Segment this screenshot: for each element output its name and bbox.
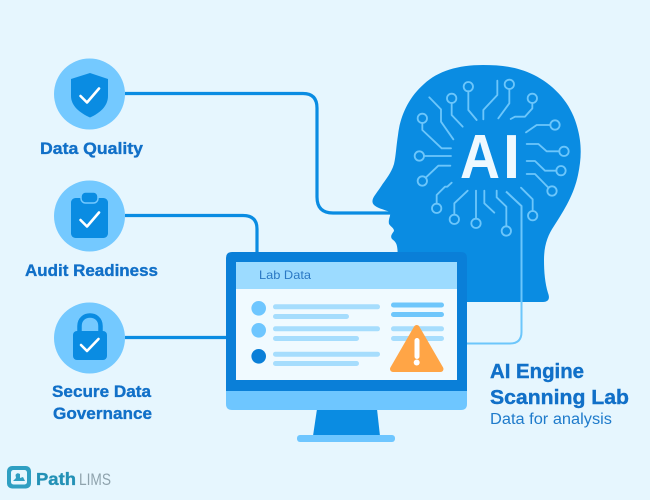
item: audit readiness (25, 180, 158, 280)
callout: AI engine scanning lab: AI Engine (490, 360, 584, 383)
screen header bar (236, 262, 457, 289)
monitor screen (236, 262, 457, 380)
connector: data quality to head (125, 94, 392, 213)
icon: padlock check (54, 302, 125, 374)
AI label in head: A (460, 123, 500, 192)
logo: PathLIMS: LIMS (79, 470, 111, 489)
icon: AI head silhouette (372, 65, 581, 302)
label: Secure Data (52, 383, 152, 401)
callout: AI engine scanning lab (490, 360, 629, 428)
monitor foot (297, 435, 395, 442)
icon: warning triangle (393, 328, 440, 369)
logo: PathLIMS (7, 466, 111, 489)
connector: head circuit to monitor (465, 192, 522, 344)
monitor stand (313, 409, 380, 436)
label: Audit Readiness (25, 262, 158, 280)
monitor frame (226, 252, 467, 391)
item: data quality (40, 58, 144, 158)
connector: secure data governance to monitor (125, 336, 228, 339)
screen title: Lab Data (259, 268, 311, 282)
monitor base bezel (226, 389, 467, 410)
label: Data Quality (40, 140, 144, 158)
icon: shield check (54, 58, 125, 130)
AI label in head: I (503, 123, 520, 192)
panel: computer monitor (226, 252, 467, 442)
item: secure data governance (52, 302, 152, 423)
data rows (251, 301, 444, 366)
circuit traces inside head (415, 80, 569, 236)
logo: PathLIMS: Path (36, 469, 76, 489)
connector: audit readiness to monitor (125, 216, 257, 254)
callout: AI engine scanning lab: Data for analysis (490, 411, 612, 428)
icon: clipboard check (54, 180, 125, 252)
icon: logo mark (7, 466, 31, 488)
item: secure data governance: Governance (53, 405, 152, 423)
callout: AI engine scanning lab: Scanning Lab (490, 386, 629, 409)
